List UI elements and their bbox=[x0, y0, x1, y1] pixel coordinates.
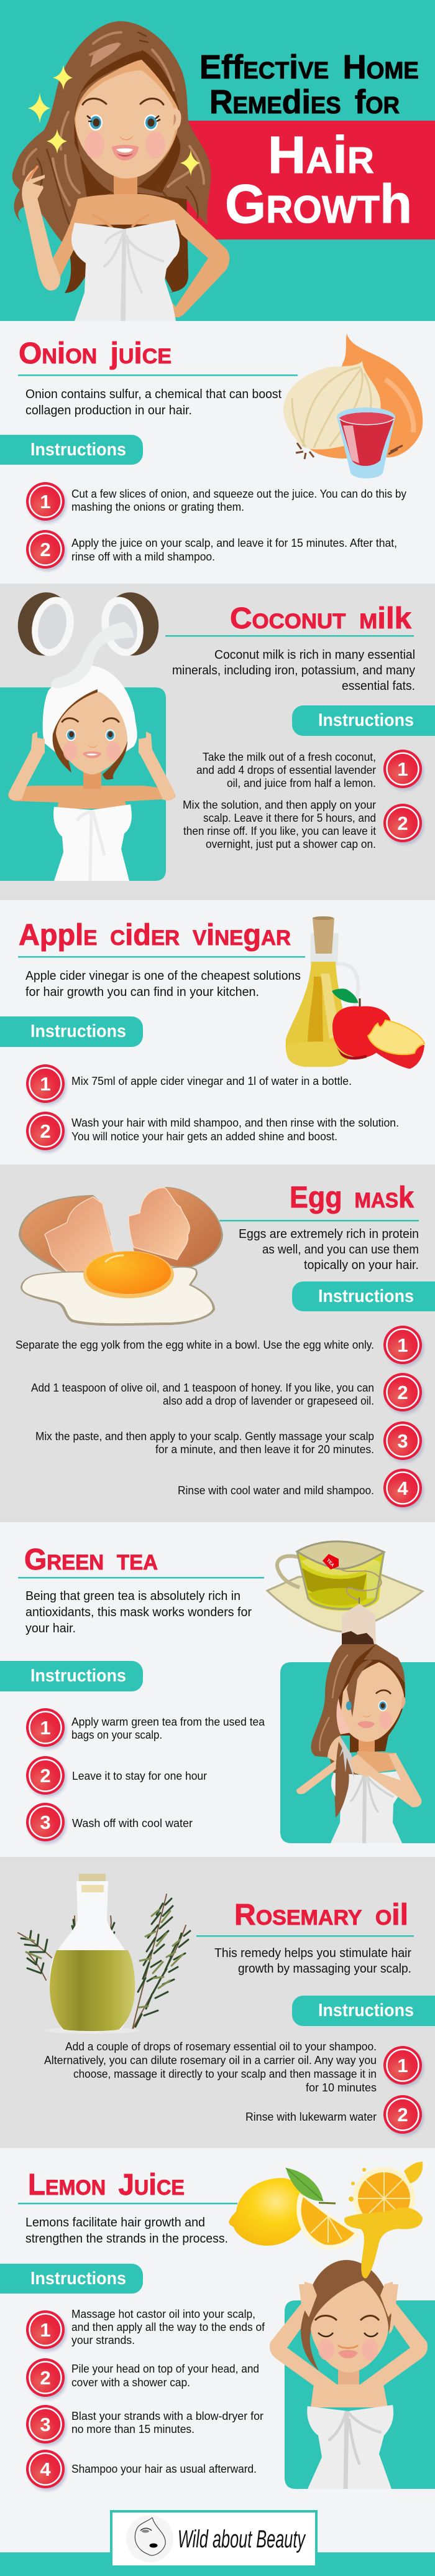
teal backdrop bbox=[285, 2300, 435, 2489]
step 2: then rinse off. If you like, you can leave it bbox=[183, 825, 376, 837]
heading: Coconut milk: Coconut milk bbox=[230, 602, 411, 635]
instructions label: Instructions bbox=[30, 2269, 126, 2289]
face features bbox=[62, 718, 121, 761]
step 4 bbox=[26, 2450, 257, 2491]
step 2: Leave it to stay for one hour bbox=[72, 1770, 207, 1782]
step 2: 2 bbox=[40, 1120, 51, 1142]
step 1 bbox=[26, 2308, 265, 2351]
panel: onion juice bbox=[0, 321, 435, 584]
wet hair strands bbox=[336, 1742, 349, 1818]
face bbox=[75, 60, 181, 179]
step 2: 2 bbox=[40, 539, 51, 560]
hand on strands bbox=[349, 1757, 373, 1777]
illustration: oil bottle bbox=[45, 1874, 139, 2034]
step 1: choose, massage it directly to your scalp and then massage it in bbox=[73, 2068, 377, 2080]
panel: header bbox=[0, 0, 435, 321]
step 3 bbox=[35, 1421, 424, 1462]
step 3 bbox=[26, 2405, 263, 2446]
instructions label bbox=[0, 2264, 143, 2294]
illustration: coconut halves pouring milk bbox=[13, 588, 163, 660]
heading: Lemon Juice: Lemon Juice bbox=[28, 2169, 185, 2202]
step 3: Blast your strands with a blow-dryer for bbox=[71, 2410, 263, 2422]
step 4: 4 bbox=[397, 1477, 408, 1499]
step 4: Shampoo your hair as usual afterward. bbox=[71, 2463, 257, 2475]
illustration: woman massaging scalp bbox=[270, 2260, 428, 2489]
step 1 bbox=[26, 1064, 352, 1105]
step 3: 3 bbox=[40, 1811, 51, 1833]
intro text: growth by massaging your scalp. bbox=[238, 1961, 411, 1976]
step 1: 1 bbox=[397, 1334, 408, 1356]
title: Hair Growth: Hair bbox=[268, 126, 374, 184]
illustration: vinegar bottle and apple bbox=[286, 916, 424, 1069]
intro text: minerals, including iron, potassium, and many bbox=[172, 663, 416, 677]
step 3 bbox=[26, 1803, 193, 1844]
illustration: woman rinsing hair with tea bbox=[296, 1631, 421, 1843]
intro text bbox=[25, 2215, 228, 2246]
step 1: Alternatively, you can dilute rosemary oil in a carrier oil. Any way you bbox=[44, 2054, 377, 2067]
step 3: Mix the paste, and then apply to your scalp. Gently massage your scalp bbox=[35, 1430, 374, 1443]
step 4: Rinse with cool water and mild shampoo. bbox=[178, 1484, 374, 1497]
step 2: 2 bbox=[397, 2104, 408, 2126]
heading: Green tea: Green tea bbox=[24, 1543, 158, 1576]
step 1: oil, and juice from half a lemon. bbox=[227, 777, 376, 789]
intro text: your hair. bbox=[25, 1621, 76, 1635]
red title band bbox=[186, 121, 435, 239]
step 1: and add 4 drops of essential lavender bbox=[196, 764, 376, 776]
step 2: Pile your head on top of your head, and bbox=[71, 2363, 259, 2375]
intro text: as well, and you can use them bbox=[262, 1242, 419, 1257]
illustration: cup of green tea bbox=[267, 1541, 423, 1652]
step 1: mashing the onions or grating them. bbox=[71, 501, 244, 513]
title: Hair Growth bbox=[225, 126, 412, 235]
step 1: bags on your scalp. bbox=[71, 1729, 162, 1741]
face bbox=[341, 1662, 404, 1742]
step 4 bbox=[178, 1469, 424, 1510]
instructions label: Instructions bbox=[30, 1021, 126, 1041]
intro text: antioxidants, this mask works wonders for bbox=[25, 1605, 252, 1619]
step 1: Add a couple of drops of rosemary essential oil to your shampoo. bbox=[65, 2040, 377, 2053]
illustration: rosemary sprigs bbox=[18, 1894, 190, 2030]
step 2 bbox=[183, 799, 424, 850]
instructions label bbox=[292, 1281, 435, 1311]
step 1 bbox=[26, 1708, 265, 1749]
panel: rosemary oil bbox=[0, 1857, 435, 2148]
intro text bbox=[25, 969, 301, 999]
instructions label: Instructions bbox=[30, 1666, 126, 1686]
title: Effective Home Remedies for: Remedies for bbox=[209, 83, 400, 121]
face features bbox=[346, 1690, 392, 1729]
logo: Wild about Beauty: Wild about Beauty bbox=[178, 2526, 306, 2553]
step 2: Wash your hair with mild shampoo, and then rinse with the solution. bbox=[71, 1117, 399, 1129]
step 2: cover with a shower cap. bbox=[71, 2376, 190, 2389]
title: Effective Home Remedies for bbox=[199, 49, 419, 121]
step 1: 1 bbox=[40, 491, 51, 513]
step 2: rinse off with a mild shampoo. bbox=[71, 551, 215, 563]
heading: Rosemary oil: Rosemary oil bbox=[234, 1899, 408, 1932]
instructions label bbox=[0, 1661, 143, 1691]
step 1: for 10 minutes bbox=[306, 2081, 377, 2094]
step 2: 2 bbox=[397, 812, 408, 834]
intro text: Coconut milk is rich in many essential bbox=[214, 648, 415, 662]
illustration: woman in towel wrap bbox=[8, 622, 175, 881]
panel: egg mask bbox=[0, 1165, 435, 1522]
step 3: for a minute, and then leave it for 20 minutes. bbox=[155, 1443, 374, 1456]
instructions label bbox=[292, 1996, 435, 2026]
step 1 bbox=[196, 750, 424, 791]
step 2 bbox=[26, 2358, 259, 2399]
step 1: 1 bbox=[40, 2319, 51, 2341]
step 2: 2 bbox=[397, 1382, 408, 1403]
instructions label bbox=[0, 435, 143, 465]
illustration: cracked egg bbox=[19, 1187, 223, 1326]
intro text bbox=[172, 648, 416, 693]
heading: Egg mask: Egg mask bbox=[290, 1181, 414, 1214]
intro text: Onion contains sulfur, a chemical that can boost bbox=[25, 387, 282, 401]
logo icon: face line drawing bbox=[126, 2515, 173, 2562]
step 3: 3 bbox=[40, 2414, 51, 2435]
step 1: 1 bbox=[397, 758, 408, 780]
step 2: Add 1 teaspoon of olive oil, and 1 teaspoon of honey. If you like, you can bbox=[31, 1382, 374, 1394]
step 1: Separate the egg yolk from the egg white in a bowl. Use the egg white only. bbox=[16, 1339, 374, 1351]
intro text: strengthen the strands in the process. bbox=[25, 2231, 228, 2246]
step 2: Rinse with lukewarm water bbox=[245, 2111, 377, 2123]
teal backdrop bbox=[280, 1662, 435, 1843]
intro text: Eggs are extremely rich in protein bbox=[239, 1227, 419, 1241]
step 1: Massage hot castor oil into your scalp, bbox=[71, 2308, 255, 2320]
illustration: cup of green tea: TEA bbox=[326, 1558, 335, 1568]
step 2 bbox=[26, 1756, 207, 1797]
step 2: also add a drop of lavender or grapeseed oil. bbox=[163, 1395, 374, 1407]
step 2: overnight, just put a shower cap on. bbox=[206, 838, 376, 850]
sparkles bbox=[28, 65, 200, 176]
step 1: Apply warm green tea from the used tea bbox=[71, 1716, 265, 1728]
step 2: Mix the solution, and then apply on your bbox=[183, 799, 376, 811]
instructions label: Instructions bbox=[318, 1286, 414, 1306]
step 2: scalp. Leave it there for 5 hours, and bbox=[203, 812, 376, 824]
step 4: 4 bbox=[40, 2458, 51, 2480]
step 1: your strands. bbox=[71, 2334, 135, 2346]
step 3: no more than 15 minutes. bbox=[71, 2423, 195, 2435]
step 1: Take the milk out of a fresh coconut, bbox=[203, 751, 376, 763]
step 2 bbox=[31, 1373, 424, 1414]
intro text bbox=[25, 387, 282, 417]
teal backdrop bbox=[0, 687, 166, 881]
step 1 bbox=[44, 2040, 424, 2094]
step 1: 1 bbox=[40, 1073, 51, 1095]
step 1: Mix 75ml of apple cider vinegar and 1l of water in a bottle. bbox=[71, 1075, 352, 1087]
intro text: topically on your hair. bbox=[304, 1258, 419, 1272]
step 1 bbox=[16, 1326, 424, 1367]
arm and hand raised to hair bbox=[22, 167, 84, 291]
illustration: lemon with juice splash bbox=[229, 2162, 423, 2278]
step 3: Wash off with cool water bbox=[72, 1817, 193, 1830]
intro text: essential fats. bbox=[342, 679, 415, 693]
intro text: Being that green tea is absolutely rich in bbox=[25, 1589, 240, 1603]
step 1: 1 bbox=[40, 1717, 51, 1739]
heading: Onion juice: Onion juice bbox=[19, 337, 172, 370]
intro text: This remedy helps you stimulate hair bbox=[214, 1946, 411, 1960]
instructions label: Instructions bbox=[318, 2001, 414, 2020]
heading: Apple cider vinegar: Apple cider vinegar bbox=[19, 919, 291, 952]
title: Hair Growth: Growth bbox=[225, 173, 412, 235]
step 2: 2 bbox=[40, 2367, 51, 2389]
step 3: 3 bbox=[397, 1430, 408, 1452]
instructions label: Instructions bbox=[30, 440, 126, 460]
step 2: You will notice your hair gets an added shine and boost. bbox=[71, 1130, 337, 1143]
step 1: and then apply all the way to the ends of bbox=[71, 2321, 265, 2333]
step 1: 1 bbox=[397, 2055, 408, 2076]
step 1: Cut a few slices of onion, and squeeze out the juice. You can do this by bbox=[71, 488, 406, 500]
step 2 bbox=[26, 1112, 399, 1153]
title: Effective Home Remedies for: Effective Home bbox=[199, 49, 419, 86]
logo: Wild about Beauty bbox=[110, 2510, 318, 2568]
instructions label bbox=[0, 1016, 143, 1047]
instructions label bbox=[292, 705, 435, 736]
intro text: Apple cider vinegar is one of the cheapest solutions bbox=[25, 969, 301, 983]
intro text: Lemons facilitate hair growth and bbox=[25, 2215, 205, 2230]
instructions label: Instructions bbox=[318, 710, 414, 730]
panel: green tea bbox=[0, 1522, 435, 1857]
step 2: 2 bbox=[40, 1765, 51, 1787]
illustration: woman with shiny hair bbox=[12, 21, 229, 321]
intro text bbox=[239, 1227, 419, 1272]
illustration: onion and juice glass bbox=[283, 333, 423, 478]
panel: apple cider vinegar bbox=[0, 900, 435, 1165]
footer bar bbox=[0, 2552, 435, 2576]
step 1 bbox=[26, 482, 406, 523]
panel: lemon juice bbox=[0, 2148, 435, 2552]
step 2 bbox=[26, 530, 397, 571]
panel: coconut milk bbox=[0, 584, 435, 900]
intro text: for hair growth you can find in your kitchen. bbox=[25, 985, 259, 999]
intro text bbox=[214, 1946, 411, 1976]
step 2: Apply the juice on your scalp, and leave it for 15 minutes. After that, bbox=[71, 537, 397, 549]
intro text bbox=[25, 1589, 252, 1635]
intro text: collagen production in our hair. bbox=[25, 403, 192, 417]
towel dress bbox=[331, 1771, 403, 1843]
towel dress bbox=[71, 220, 180, 321]
step 2 bbox=[245, 2095, 424, 2136]
